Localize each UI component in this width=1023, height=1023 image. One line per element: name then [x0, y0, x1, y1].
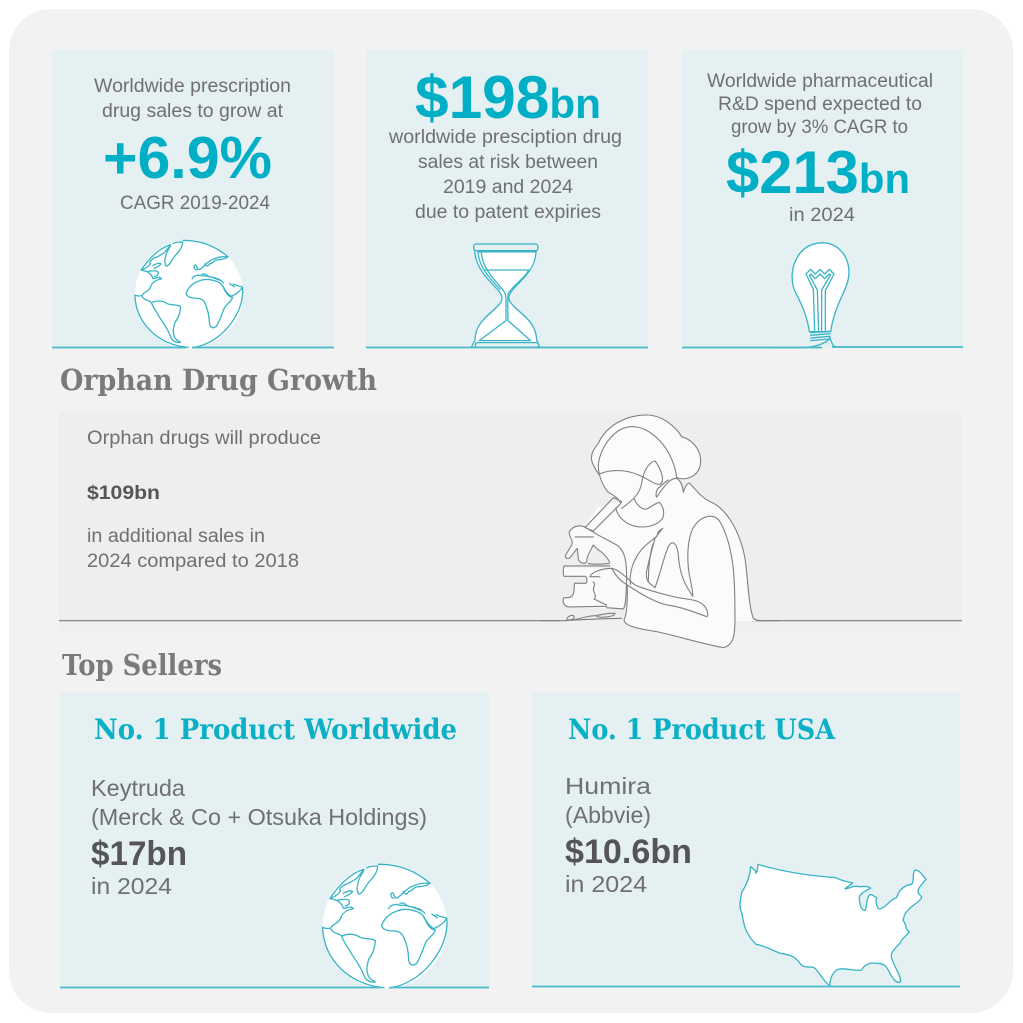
text: CAGR period: CAGR 2019-2024 — [120, 193, 270, 214]
heading: No. 1 Product Worldwide: No. 1 Product Worldwide — [94, 713, 457, 746]
panel: R&D spend — [682, 50, 963, 348]
icon: hourglass — [472, 244, 539, 347]
text: Humira: Humira — [565, 773, 651, 799]
heading: Top Sellers: Top Sellers — [62, 648, 222, 682]
text: patent expiries: sales at risk between — [418, 152, 598, 173]
text: R&D intro: R&D spend expected to — [718, 94, 922, 115]
panel: No. 1 product USA — [532, 692, 960, 987]
baseline: panel USA — [532, 986, 960, 988]
text: orphan drugs will produce: Orphan drugs will produce — [87, 428, 321, 449]
stat: $213bn: $213bn — [726, 139, 910, 206]
baseline: panel 1 — [52, 346, 334, 348]
text: R&D intro — [707, 71, 933, 138]
heading: Orphan Drug Growth: Orphan Drug Growth — [60, 363, 377, 397]
baseline: panel worldwide — [60, 986, 489, 988]
icon: globe — [135, 240, 243, 348]
text: sales growth intro: Worldwide prescription — [94, 76, 291, 97]
text: Humira: (Abbvie) — [565, 802, 651, 828]
text: sales growth intro — [94, 76, 291, 122]
text: R&D intro: Worldwide pharmaceutical — [707, 71, 933, 92]
text: sales growth intro: drug sales to grow at — [102, 101, 284, 122]
stat: $10.6bn: $10.6bn — [565, 833, 692, 871]
baseline: panel 2 — [366, 346, 648, 348]
panel: No. 1 product worldwide — [60, 692, 489, 988]
text: Keytruda — [91, 775, 427, 830]
text: in 2024: in 2024 — [565, 871, 647, 897]
baseline: orphan panel — [59, 620, 962, 622]
stat: $198bn: $198bn — [415, 64, 601, 131]
icon: USA map — [740, 864, 926, 986]
text: in 2024: in 2024 — [789, 205, 855, 226]
text: additional sales: in additional sales in — [87, 526, 265, 547]
icon: light bulb — [770, 243, 880, 348]
text: patent expiries: 2019 and 2024 — [443, 177, 573, 198]
heading: No. 1 Product USA: No. 1 Product USA — [568, 713, 836, 746]
text: R&D intro: grow by 3% CAGR to — [731, 117, 908, 138]
text: additional sales: 2024 compared to 2018 — [87, 551, 299, 572]
text: patent expiries: worldwide presciption drug — [388, 127, 622, 148]
icon: globe — [323, 864, 447, 988]
illustration: scientist at microscope — [540, 415, 780, 648]
panel: prescription drug sales growth — [52, 50, 334, 348]
text: Humira — [565, 773, 651, 828]
text: Keytruda: Keytruda — [91, 775, 185, 801]
panel: sales at risk — [366, 50, 648, 348]
text: Keytruda: (Merck & Co + Otsuka Holdings) — [91, 804, 427, 830]
text: patent expiries: due to patent expiries — [415, 202, 601, 223]
text: additional sales — [87, 526, 299, 572]
stat: +6.9%: +6.9% — [103, 125, 272, 191]
text: in 2024: in 2024 — [91, 873, 172, 899]
stat: $17bn: $17bn — [91, 835, 187, 873]
stat: $109bn: $109bn — [87, 483, 160, 504]
panel: orphan drugs — [59, 412, 962, 648]
baseline: panel 3 — [682, 346, 963, 348]
text: patent expiries — [388, 127, 622, 223]
